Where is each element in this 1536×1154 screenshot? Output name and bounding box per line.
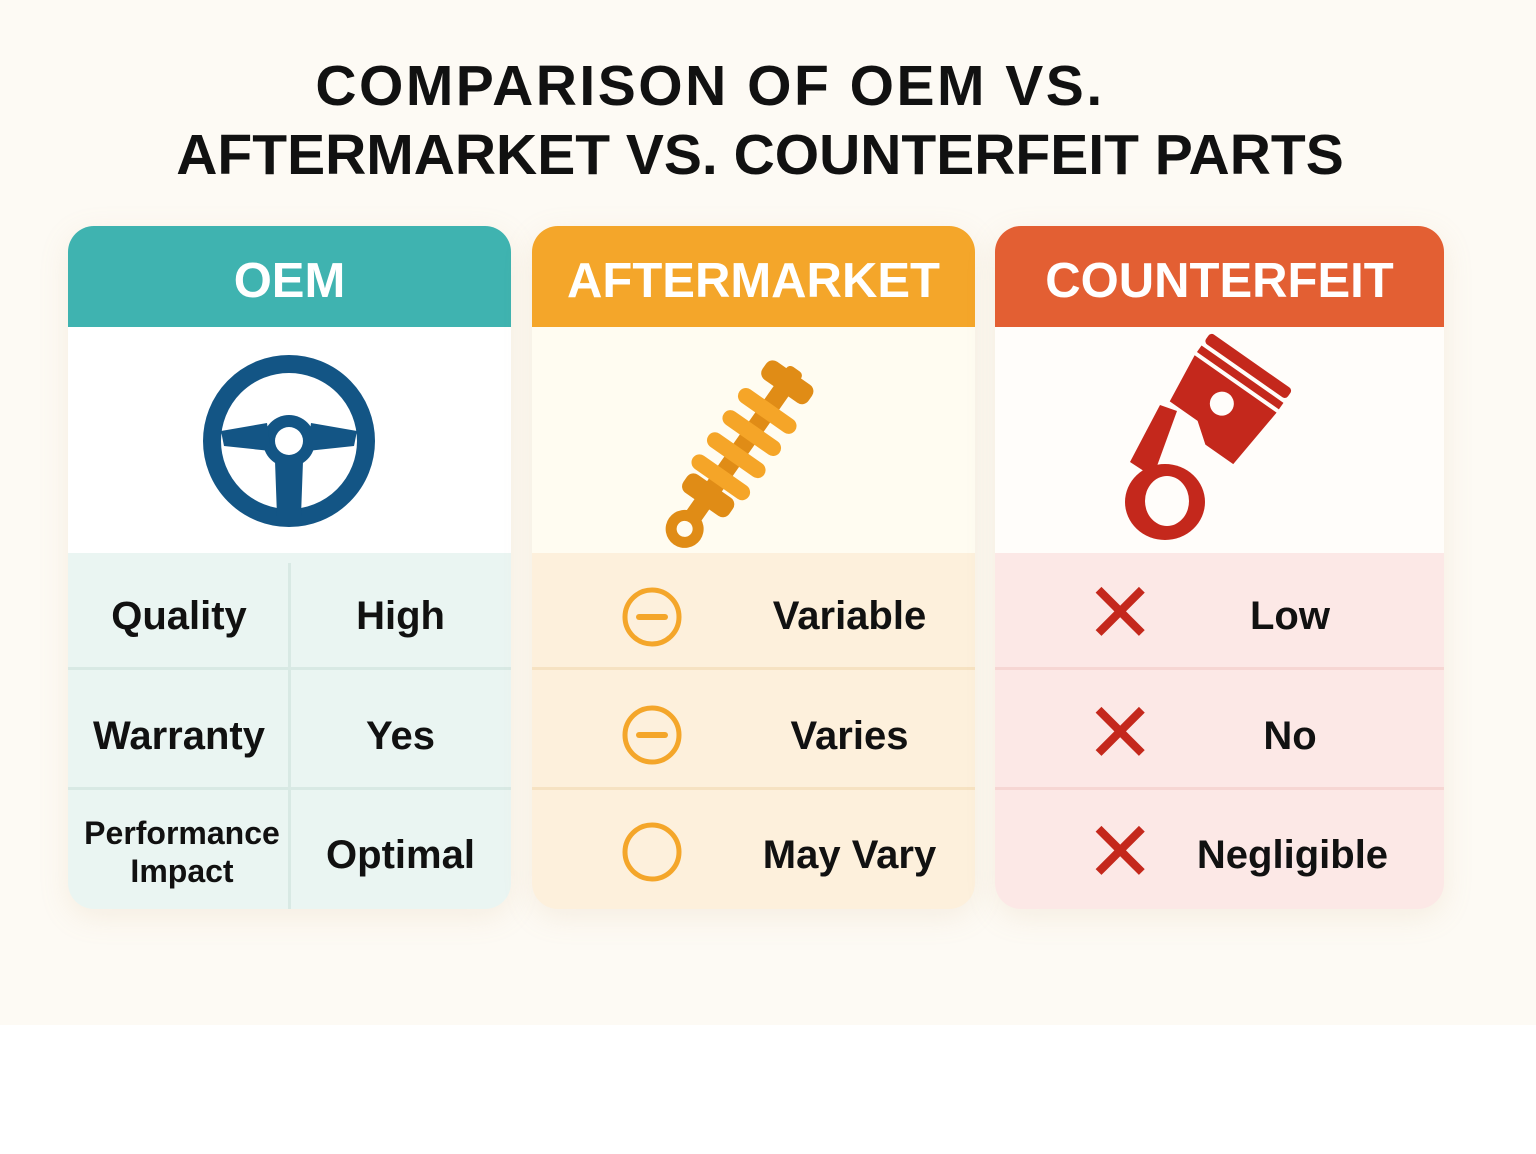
row: varies: Varies <box>791 714 908 758</box>
row: quality <box>68 553 511 670</box>
row: negligible: ✕ <box>1085 805 1155 899</box>
icon: piston <box>995 327 1444 553</box>
row: performance <box>84 815 475 889</box>
row: low: Low <box>1250 594 1330 638</box>
icon: steering wheel <box>68 327 511 553</box>
row: warranty <box>68 673 511 790</box>
row: quality: Quality <box>111 594 247 638</box>
heading: counterfeit: COUNTERFEIT <box>1045 254 1394 308</box>
row: may vary: May Vary <box>763 833 936 877</box>
text: COMPARISON OF OEM VS. <box>315 54 1105 118</box>
row: quality: High <box>356 594 445 638</box>
panel: aftermarket <box>532 226 975 909</box>
panel: counterfeit <box>995 226 1444 909</box>
heading: counterfeit <box>995 226 1444 327</box>
row: varies <box>532 673 975 790</box>
heading: OEM <box>68 226 511 327</box>
row: low: ✕ <box>1085 566 1155 660</box>
title <box>176 54 1344 187</box>
heading: aftermarket: AFTERMARKET <box>567 254 940 308</box>
row: variable <box>532 553 975 670</box>
row: may vary <box>622 822 936 882</box>
text: AFTERMARKET VS. COUNTERFEIT PARTS <box>176 123 1344 187</box>
panel: OEM <box>68 226 511 909</box>
heading: aftermarket <box>532 226 975 327</box>
icon: shock absorber <box>532 327 975 553</box>
row: warranty: Yes <box>366 714 435 758</box>
row: variable: Variable <box>773 594 926 638</box>
row: performance: Optimal <box>326 833 475 877</box>
row: low <box>995 553 1444 670</box>
row: no: ✕ <box>1085 686 1155 780</box>
row: negligible: Negligible <box>1197 833 1388 877</box>
heading: OEM: OEM <box>234 254 345 308</box>
row: no <box>995 673 1444 790</box>
row: performance: Impact <box>130 853 234 889</box>
row: no: No <box>1263 714 1317 758</box>
row: performance: Performance <box>84 815 280 851</box>
row: negligible <box>1085 805 1388 899</box>
row: warranty: Warranty <box>93 714 265 758</box>
